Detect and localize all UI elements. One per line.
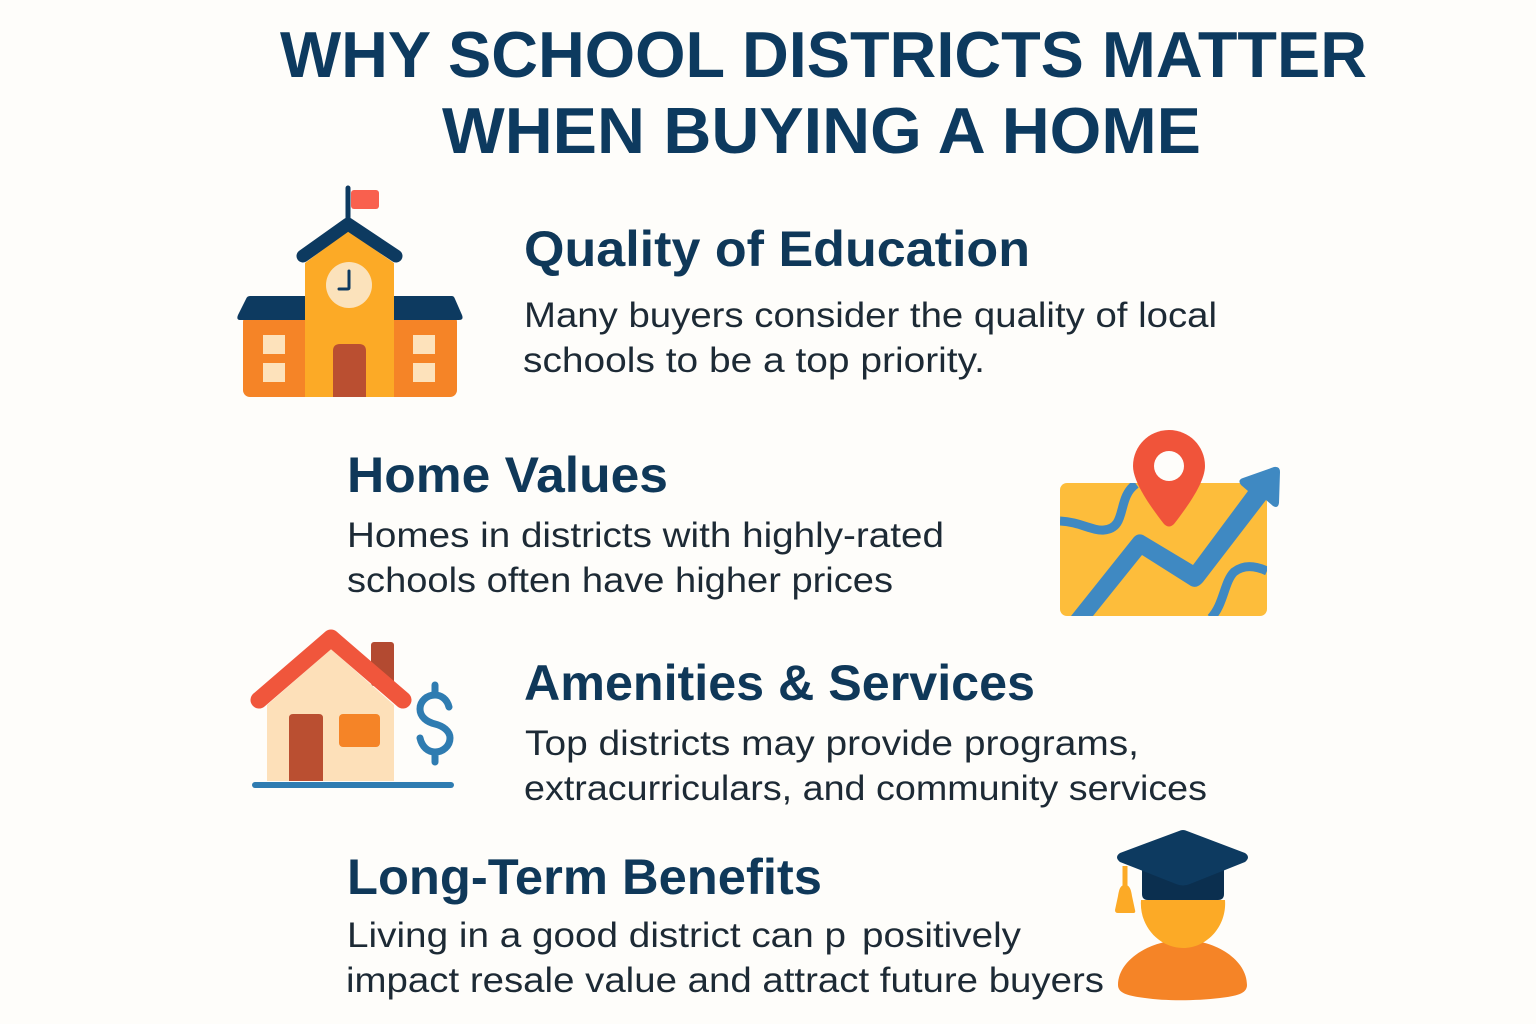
- section: amenities and services: Amenities & Services: [524, 655, 1035, 711]
- section: long-term benefits: Long-Term Benefits: [347, 849, 822, 905]
- section: quality of education: Quality of Education: [524, 221, 1030, 277]
- section: home values: schools often have higher prices: [347, 561, 893, 600]
- section: quality of education: [523, 221, 1217, 380]
- section: home values: Homes in districts with highly-rated: [347, 516, 944, 555]
- icon: house with dollar sign: [255, 638, 451, 785]
- section: quality of education: schools to be a top priority.: [523, 341, 985, 380]
- section: home values: [347, 447, 944, 600]
- section: amenities and services: [524, 655, 1207, 808]
- title: WHEN BUYING A HOME: [442, 94, 1201, 167]
- section: long-term benefits: [346, 849, 1104, 1000]
- icon: school building: [237, 188, 463, 397]
- title: [280, 18, 1367, 167]
- icon: map with pin and rising arrow: [1060, 430, 1280, 618]
- section: amenities and services: Top districts may provide programs,: [525, 724, 1139, 763]
- icon: graduate with cap: [1115, 830, 1248, 1000]
- section: home values: Home Values: [347, 447, 668, 503]
- section: long-term benefits: impact resale value and attract future buyers: [346, 961, 1104, 1000]
- section: quality of education: Many buyers consider the quality of local: [524, 296, 1217, 335]
- title: WHY SCHOOL DISTRICTS MATTER: [280, 18, 1367, 91]
- section: long-term benefits: positively: [862, 916, 1022, 955]
- section: long-term benefits: Living in a good district can p: [347, 916, 846, 955]
- section: amenities and services: extracurriculars, and community services: [524, 769, 1207, 808]
